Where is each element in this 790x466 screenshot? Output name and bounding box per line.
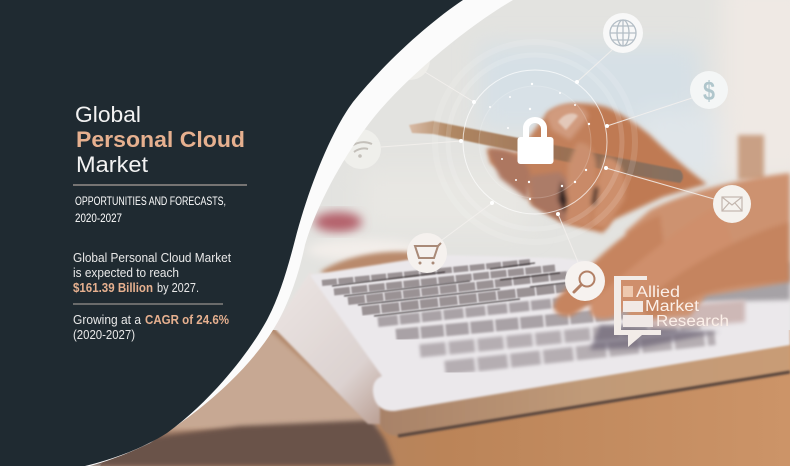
keyboard shadow under hand	[590, 325, 720, 350]
laptop deck	[310, 255, 790, 411]
blurred deck behind hand	[690, 262, 790, 302]
white curved band	[0, 0, 513, 466]
laptop lid wedge	[273, 272, 420, 425]
title	[75, 102, 245, 177]
market value statement: $161.39 Billion	[73, 281, 153, 295]
icon: wifi	[341, 129, 381, 169]
icon: shopping cart	[407, 233, 447, 273]
market value statement: by 2027.	[157, 281, 199, 295]
subtitle	[75, 196, 226, 225]
icon: envelope	[713, 185, 751, 223]
phone	[409, 121, 683, 183]
connector lines	[381, 50, 714, 262]
phone-holding hand	[487, 103, 707, 233]
title: Global	[75, 102, 141, 127]
table	[100, 330, 790, 466]
CAGR statement	[73, 313, 229, 342]
gripping fingers	[488, 143, 625, 228]
title: Personal Cloud	[76, 127, 245, 152]
subtitle: OPPORTUNITIES AND FORECASTS,	[75, 196, 226, 208]
subtitle: 2020-2027	[75, 213, 122, 225]
title: Market	[76, 152, 148, 177]
icon: padlock	[518, 117, 554, 164]
background sleeve	[738, 135, 764, 180]
icon: dollar: $	[703, 76, 715, 106]
background red object	[314, 212, 362, 232]
logo: Allied Market Research: Allied	[636, 284, 680, 301]
market value statement: is expected to reach	[73, 266, 179, 280]
logo: Allied Market Research: Market	[645, 298, 700, 315]
table shadow band	[60, 420, 395, 466]
laptop front silver edge	[380, 340, 790, 436]
CAGR statement: (2020-2027)	[73, 328, 135, 342]
thumb	[546, 104, 588, 140]
pale patch behind logo text	[650, 300, 745, 330]
logo: Allied Market Research	[614, 276, 729, 347]
dark left panel	[0, 0, 463, 466]
icon: globe	[603, 13, 643, 53]
logo: Allied Market Research: Research	[656, 313, 729, 330]
network nodes	[459, 80, 609, 216]
icon: dollar	[690, 71, 728, 109]
market value statement	[73, 251, 231, 295]
icon: magnifier	[565, 261, 605, 301]
CAGR statement: Growing at a	[73, 313, 141, 327]
concentric network rings	[435, 42, 635, 242]
keyboard keys	[322, 262, 715, 368]
typing hand	[554, 173, 790, 322]
icon: document partly hidden	[390, 40, 430, 80]
market value statement: Global Personal Cloud Market	[73, 251, 231, 265]
CAGR statement: CAGR of 24.6%	[145, 313, 229, 327]
